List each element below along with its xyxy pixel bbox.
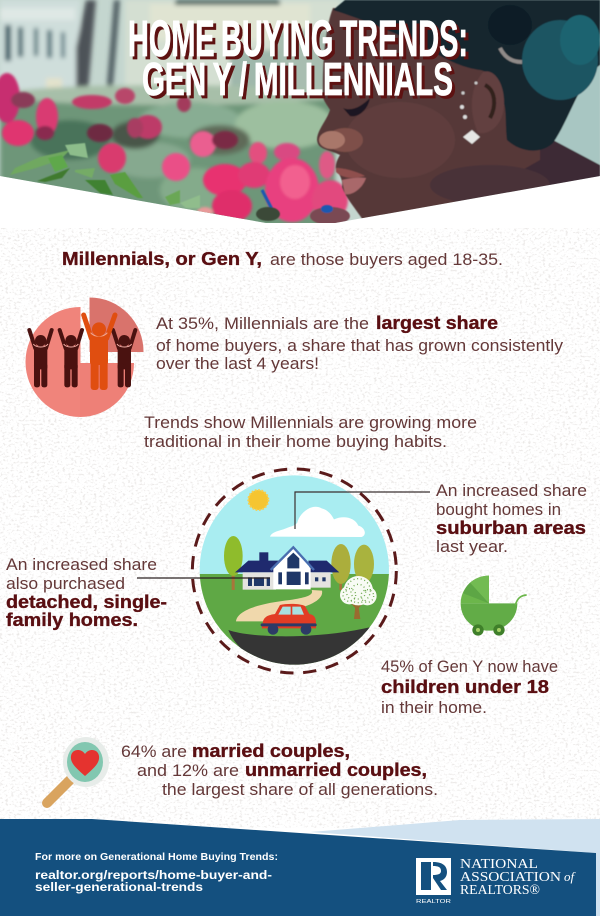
logo: REALTOR R block: REALTOR (416, 899, 451, 905)
icon: magnifying glass with heart (47, 737, 109, 803)
text: married couples (121, 741, 438, 799)
cloud (270, 507, 365, 537)
leader line to suburban areas (295, 492, 430, 529)
text: children under 18: children under 18 (381, 677, 549, 697)
flowers (0, 73, 348, 222)
fingers (310, 207, 350, 225)
text: married couples: married couples, (192, 741, 350, 761)
footer text: realtor.org/reports/home-buyer-and- (35, 868, 272, 882)
footer: blue band (0, 819, 596, 916)
text: married couples: unmarried couples, (245, 760, 427, 780)
hair (333, 0, 600, 151)
footer text: For more on Generational Home Buying Trends: (35, 851, 278, 863)
text: traditional trends (144, 414, 477, 451)
logo: REALTOR R block (416, 858, 451, 905)
text: traditional trends: traditional in their home buying habits. (144, 433, 447, 451)
footer text: seller-generational-trends (35, 880, 203, 894)
logo: National Association of Realtors wordmark: ASSOCIATION (460, 869, 561, 884)
road (228, 627, 373, 666)
text: suburban areas: last year. (436, 538, 508, 556)
green leaves (10, 143, 280, 221)
logo: National Association of Realtors wordmark: NATIONAL (460, 856, 538, 871)
intro text (62, 249, 503, 269)
text: largest share of buyers: of home buyers, a share that has grown consistently (156, 337, 564, 355)
car (261, 604, 317, 635)
hero photo: woman smelling pink flowers (0, 0, 600, 230)
logo: National Association of Realtors wordmark (460, 856, 576, 897)
logo: National Association of Realtors wordmark: of (564, 869, 576, 884)
intro text: are those buyers aged 18-35. (270, 251, 503, 269)
text: detached homes: family homes. (6, 610, 138, 630)
trees (224, 536, 374, 590)
text: largest share of buyers: largest share (376, 313, 498, 333)
text: detached homes: detached, single- (6, 592, 167, 612)
leader line to detached homes (137, 577, 270, 579)
woman (310, 0, 600, 225)
text: detached homes: also purchased (6, 575, 125, 593)
text: married couples: 64% are (121, 743, 187, 761)
illustration: suburban house in a dashed circle (192, 469, 396, 673)
text: children under 18 (381, 658, 558, 717)
footer text (35, 851, 278, 894)
text: suburban areas: An increased share (436, 482, 587, 500)
title (128, 10, 471, 108)
text: children under 18: 45% of Gen Y now have (381, 658, 558, 676)
text: married couples: the largest share of all generations. (162, 781, 438, 799)
house (235, 547, 339, 590)
blossom tree (340, 576, 377, 619)
ear (472, 71, 504, 133)
text: married couples: and 12% are (137, 762, 239, 780)
icon: green baby stroller (461, 576, 527, 636)
text: children under 18: in their home. (381, 699, 487, 717)
text: detached homes (6, 556, 167, 630)
logo: National Association of Realtors wordmark: REALTORS® (460, 882, 540, 897)
text: suburban areas: suburban areas (436, 518, 586, 538)
icon: pie chart with four raised-arm people (25, 298, 144, 417)
text: largest share of buyers (156, 313, 564, 373)
text: largest share of buyers: At 35%, Millennials are the (156, 315, 369, 333)
text: suburban areas (436, 482, 587, 556)
paper texture (0, 228, 600, 828)
footer: light blue accent (310, 819, 600, 916)
driveway (236, 590, 322, 621)
text: traditional trends: Trends show Millennials are growing more (144, 414, 477, 432)
text: detached homes: An increased share (6, 556, 157, 574)
sun (248, 490, 268, 510)
intro text: Millennials, or Gen Y, (62, 249, 262, 269)
text: suburban areas: bought homes in (436, 501, 561, 519)
text: largest share of buyers: over the last 4 years! (156, 355, 319, 373)
